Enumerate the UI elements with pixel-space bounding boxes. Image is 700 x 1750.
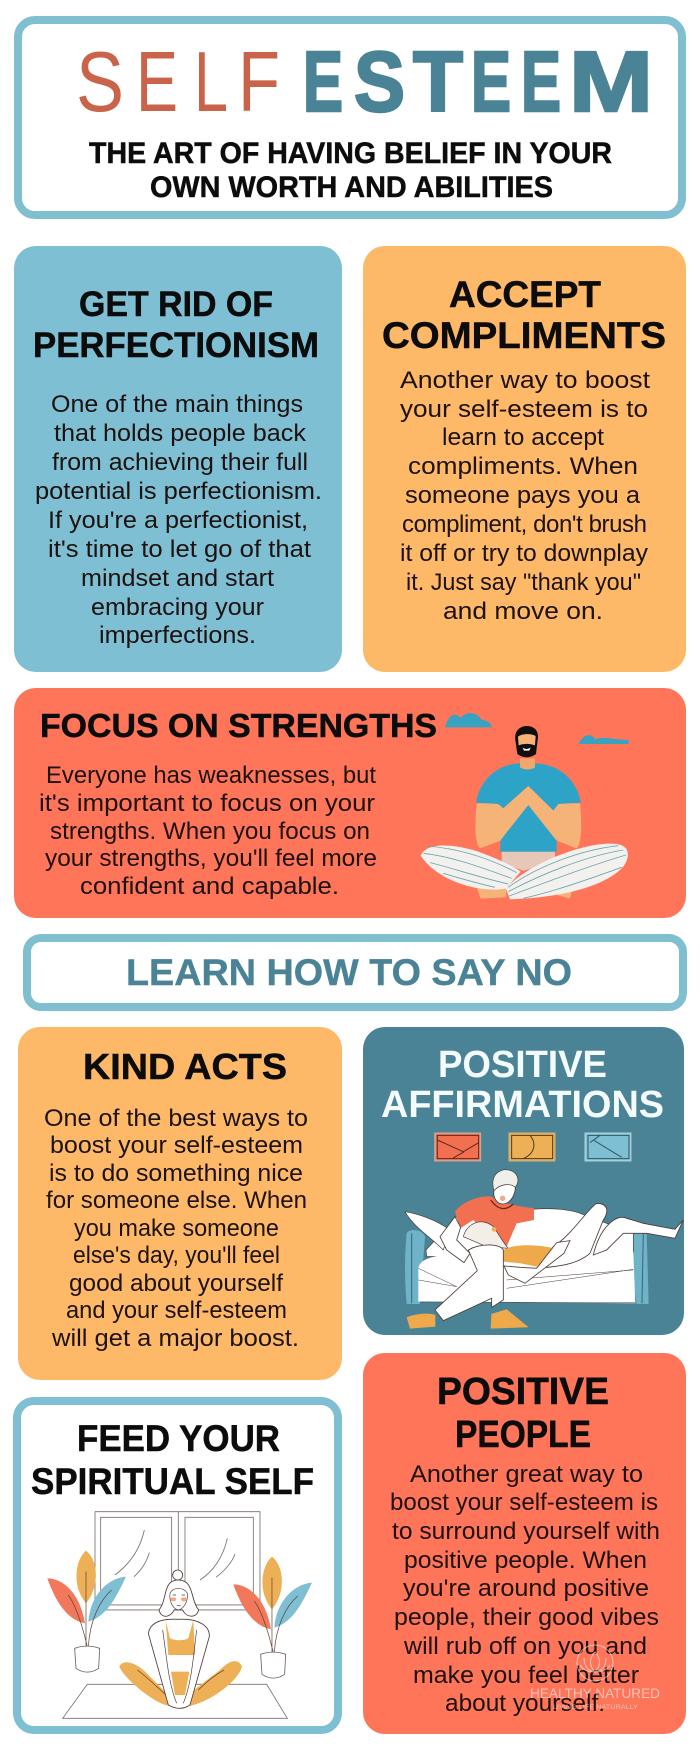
title: M <box>569 35 653 130</box>
panel: get rid of perfectionism <box>14 246 342 672</box>
body text: to surround yourself with <box>392 1518 660 1545</box>
body text: mindset and start <box>81 565 274 592</box>
body text: and your self-esteem <box>66 1297 287 1324</box>
body text: from achieving their full <box>52 449 308 476</box>
title <box>76 35 653 130</box>
heading: FOCUS ON STRENGTHS <box>40 707 437 744</box>
body text: that holds people back <box>54 420 307 447</box>
body text <box>400 367 650 625</box>
watermark: HEALTHY NATURED <box>530 1685 660 1701</box>
body text: it off or try to downplay <box>400 540 648 567</box>
panel: positive people <box>363 1353 686 1734</box>
title: T <box>413 35 463 130</box>
body text <box>39 762 377 900</box>
body text: else's day, you'll feel <box>73 1242 280 1269</box>
body text: confident and capable. <box>80 873 339 900</box>
panel: learn how to say no <box>27 938 683 1007</box>
icon: meditating man <box>421 713 629 899</box>
icon: yoga woman with plants <box>47 1512 312 1718</box>
heading <box>437 1371 609 1456</box>
body text <box>390 1461 660 1717</box>
panel: title header <box>18 20 682 215</box>
heading <box>381 1044 664 1126</box>
title: L <box>194 35 228 130</box>
heading <box>33 285 319 365</box>
title: S <box>354 35 405 130</box>
heading: FEED YOUR <box>77 1418 280 1459</box>
body text: people, their good vibes <box>394 1604 659 1631</box>
heading: LEARN HOW TO SAY NO <box>126 952 572 993</box>
heading: GET RID OF <box>79 285 273 324</box>
body text: compliments. When <box>408 453 638 480</box>
heading: COMPLIMENTS <box>382 315 666 356</box>
watermark <box>530 1645 660 1711</box>
body text: will rub off on you and <box>403 1633 647 1660</box>
body text: potential is perfectionism. <box>35 478 322 505</box>
heading: KIND ACTS <box>83 1046 287 1087</box>
panel: positive affirmations <box>363 1027 684 1335</box>
heading: SPIRITUAL SELF <box>31 1461 314 1502</box>
body text: your strengths, you'll feel more <box>45 845 377 872</box>
heading: AFFIRMATIONS <box>381 1084 664 1126</box>
heading: ACCEPT <box>449 274 601 315</box>
icon: couple on sofa <box>405 1133 683 1329</box>
title: E <box>471 35 511 130</box>
title: F <box>238 35 280 130</box>
heading: PEOPLE <box>455 1414 591 1456</box>
body text: boost your self-esteem <box>50 1132 303 1159</box>
panel: focus on strengths <box>14 688 686 918</box>
body text: If you're a perfectionist, <box>48 507 308 534</box>
body text: strengths. When you focus on <box>50 818 370 845</box>
panel: accept compliments <box>363 246 686 672</box>
body text: Another way to boost <box>400 367 650 394</box>
heading <box>382 274 666 356</box>
body text: imperfections. <box>99 622 256 649</box>
body text: good about yourself <box>69 1270 283 1297</box>
body text: your self-esteem is to <box>400 396 648 423</box>
body text: you're around positive <box>403 1575 649 1602</box>
body text: someone pays you a <box>405 482 641 509</box>
body text: embracing your <box>91 594 264 621</box>
body text: boost your self-esteem is <box>390 1489 658 1516</box>
body text: make you feel better <box>413 1662 639 1689</box>
body text: you make someone <box>74 1215 279 1242</box>
body text: One of the main things <box>51 391 303 418</box>
body text: will get a major boost. <box>51 1325 299 1352</box>
body text: One of the best ways to <box>44 1105 308 1132</box>
panel: kind acts <box>18 1027 342 1380</box>
body text: it's time to let go of that <box>48 536 311 563</box>
heading: PERFECTIONISM <box>33 326 319 365</box>
body text: about yourself. <box>445 1690 605 1717</box>
body text: and move on. <box>443 598 603 625</box>
body text: positive people. When <box>404 1547 647 1574</box>
body text: Everyone has weaknesses, but <box>46 762 376 789</box>
title: E <box>521 35 561 130</box>
body text: for someone else. When <box>46 1187 307 1214</box>
body text <box>35 391 322 649</box>
body text: is to do something nice <box>49 1160 303 1187</box>
body text: learn to accept <box>442 424 604 451</box>
subtitle: THE ART OF HAVING BELIEF IN YOUR <box>89 137 612 170</box>
subtitle: OWN WORTH AND ABILITIES <box>150 171 553 204</box>
panel: feed your spiritual self <box>17 1401 338 1730</box>
title: E <box>303 35 343 130</box>
subtitle <box>89 137 612 204</box>
title: E <box>136 35 178 130</box>
watermark: LIVING LIFE NATURALLY <box>553 1705 638 1711</box>
title: S <box>76 35 124 130</box>
body text: compliment, don't brush <box>402 511 647 538</box>
body text: Another great way to <box>410 1461 643 1488</box>
heading: POSITIVE <box>437 1371 609 1413</box>
body text: it. Just say "thank you" <box>406 569 641 596</box>
heading <box>31 1418 314 1502</box>
body text: it's important to focus on your <box>39 790 375 817</box>
body text <box>44 1105 308 1352</box>
heading: POSITIVE <box>438 1044 607 1086</box>
